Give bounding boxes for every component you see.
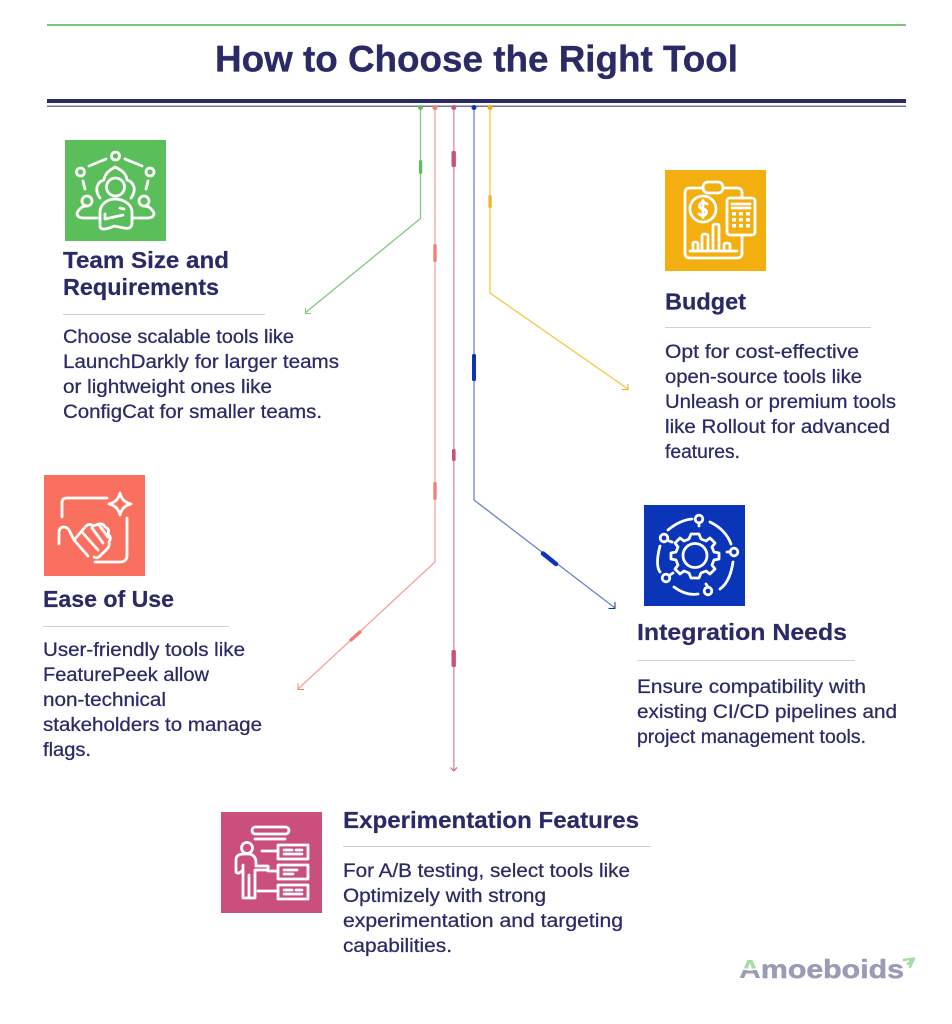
connector: green to team size	[305, 105, 423, 314]
icon: clipboard with calculator	[665, 170, 766, 271]
connector: coral to ease of use	[298, 105, 438, 690]
body text: For A/B testing, select tools like	[343, 861, 630, 882]
body text: project management tools.	[637, 727, 866, 748]
body text: open-source tools like	[665, 367, 862, 388]
body text: Optimizely with strong	[343, 886, 546, 907]
body text: FeaturePeek allow	[43, 665, 209, 686]
heading: Experimentation Features	[343, 807, 639, 833]
body text: or lightweight ones like	[63, 377, 272, 398]
panel: experimentation features	[221, 807, 651, 957]
body text: features.	[665, 442, 740, 463]
body text	[665, 342, 896, 463]
connector: yellow to budget	[488, 105, 628, 390]
body text: stakeholders to manage	[43, 715, 262, 736]
connector: blue to integration needs	[472, 105, 615, 608]
heading: Integration Needs	[637, 619, 847, 645]
heading	[63, 247, 229, 300]
header bottom navy rule	[47, 99, 906, 107]
body text: Unleash or premium tools	[665, 392, 896, 413]
icon: person with flowchart	[221, 812, 322, 913]
body text	[43, 640, 262, 761]
body text	[63, 327, 339, 423]
body text	[343, 861, 630, 957]
body text: like Rollout for advanced	[665, 417, 890, 438]
body text: ConfigCat for smaller teams.	[63, 402, 322, 423]
panel: integration needs	[637, 505, 897, 748]
body text: non-technical	[43, 690, 166, 711]
panel: budget	[665, 170, 896, 463]
heading: Requirements	[63, 274, 219, 300]
heading: Budget	[665, 288, 746, 314]
icon: hand touching square	[44, 475, 145, 576]
body text: Choose scalable tools like	[63, 327, 294, 348]
panel: team size and requirements	[63, 140, 339, 423]
title: How to Choose the Right Tool	[215, 38, 738, 80]
body text: existing CI/CD pipelines and	[637, 702, 897, 723]
header top green rule	[47, 24, 906, 26]
body text: LaunchDarkly for larger teams	[63, 352, 339, 373]
body text: Opt for cost-effective	[665, 342, 859, 363]
heading: Team Size and	[63, 247, 229, 273]
icon: gear with orbit	[644, 505, 745, 606]
heading: Ease of Use	[43, 586, 174, 612]
logo: Amoeboids: Amoeboids	[739, 954, 904, 984]
body text: User-friendly tools like	[43, 640, 245, 661]
panel: ease of use	[43, 475, 262, 761]
body text: flags.	[43, 740, 91, 761]
body text: capabilities.	[343, 936, 452, 957]
body text: Ensure compatibility with	[637, 677, 866, 698]
connector: pink to experimentation features	[450, 105, 457, 771]
body text	[637, 677, 897, 748]
icon: team with gear	[65, 140, 166, 241]
body text: experimentation and targeting	[343, 911, 623, 932]
